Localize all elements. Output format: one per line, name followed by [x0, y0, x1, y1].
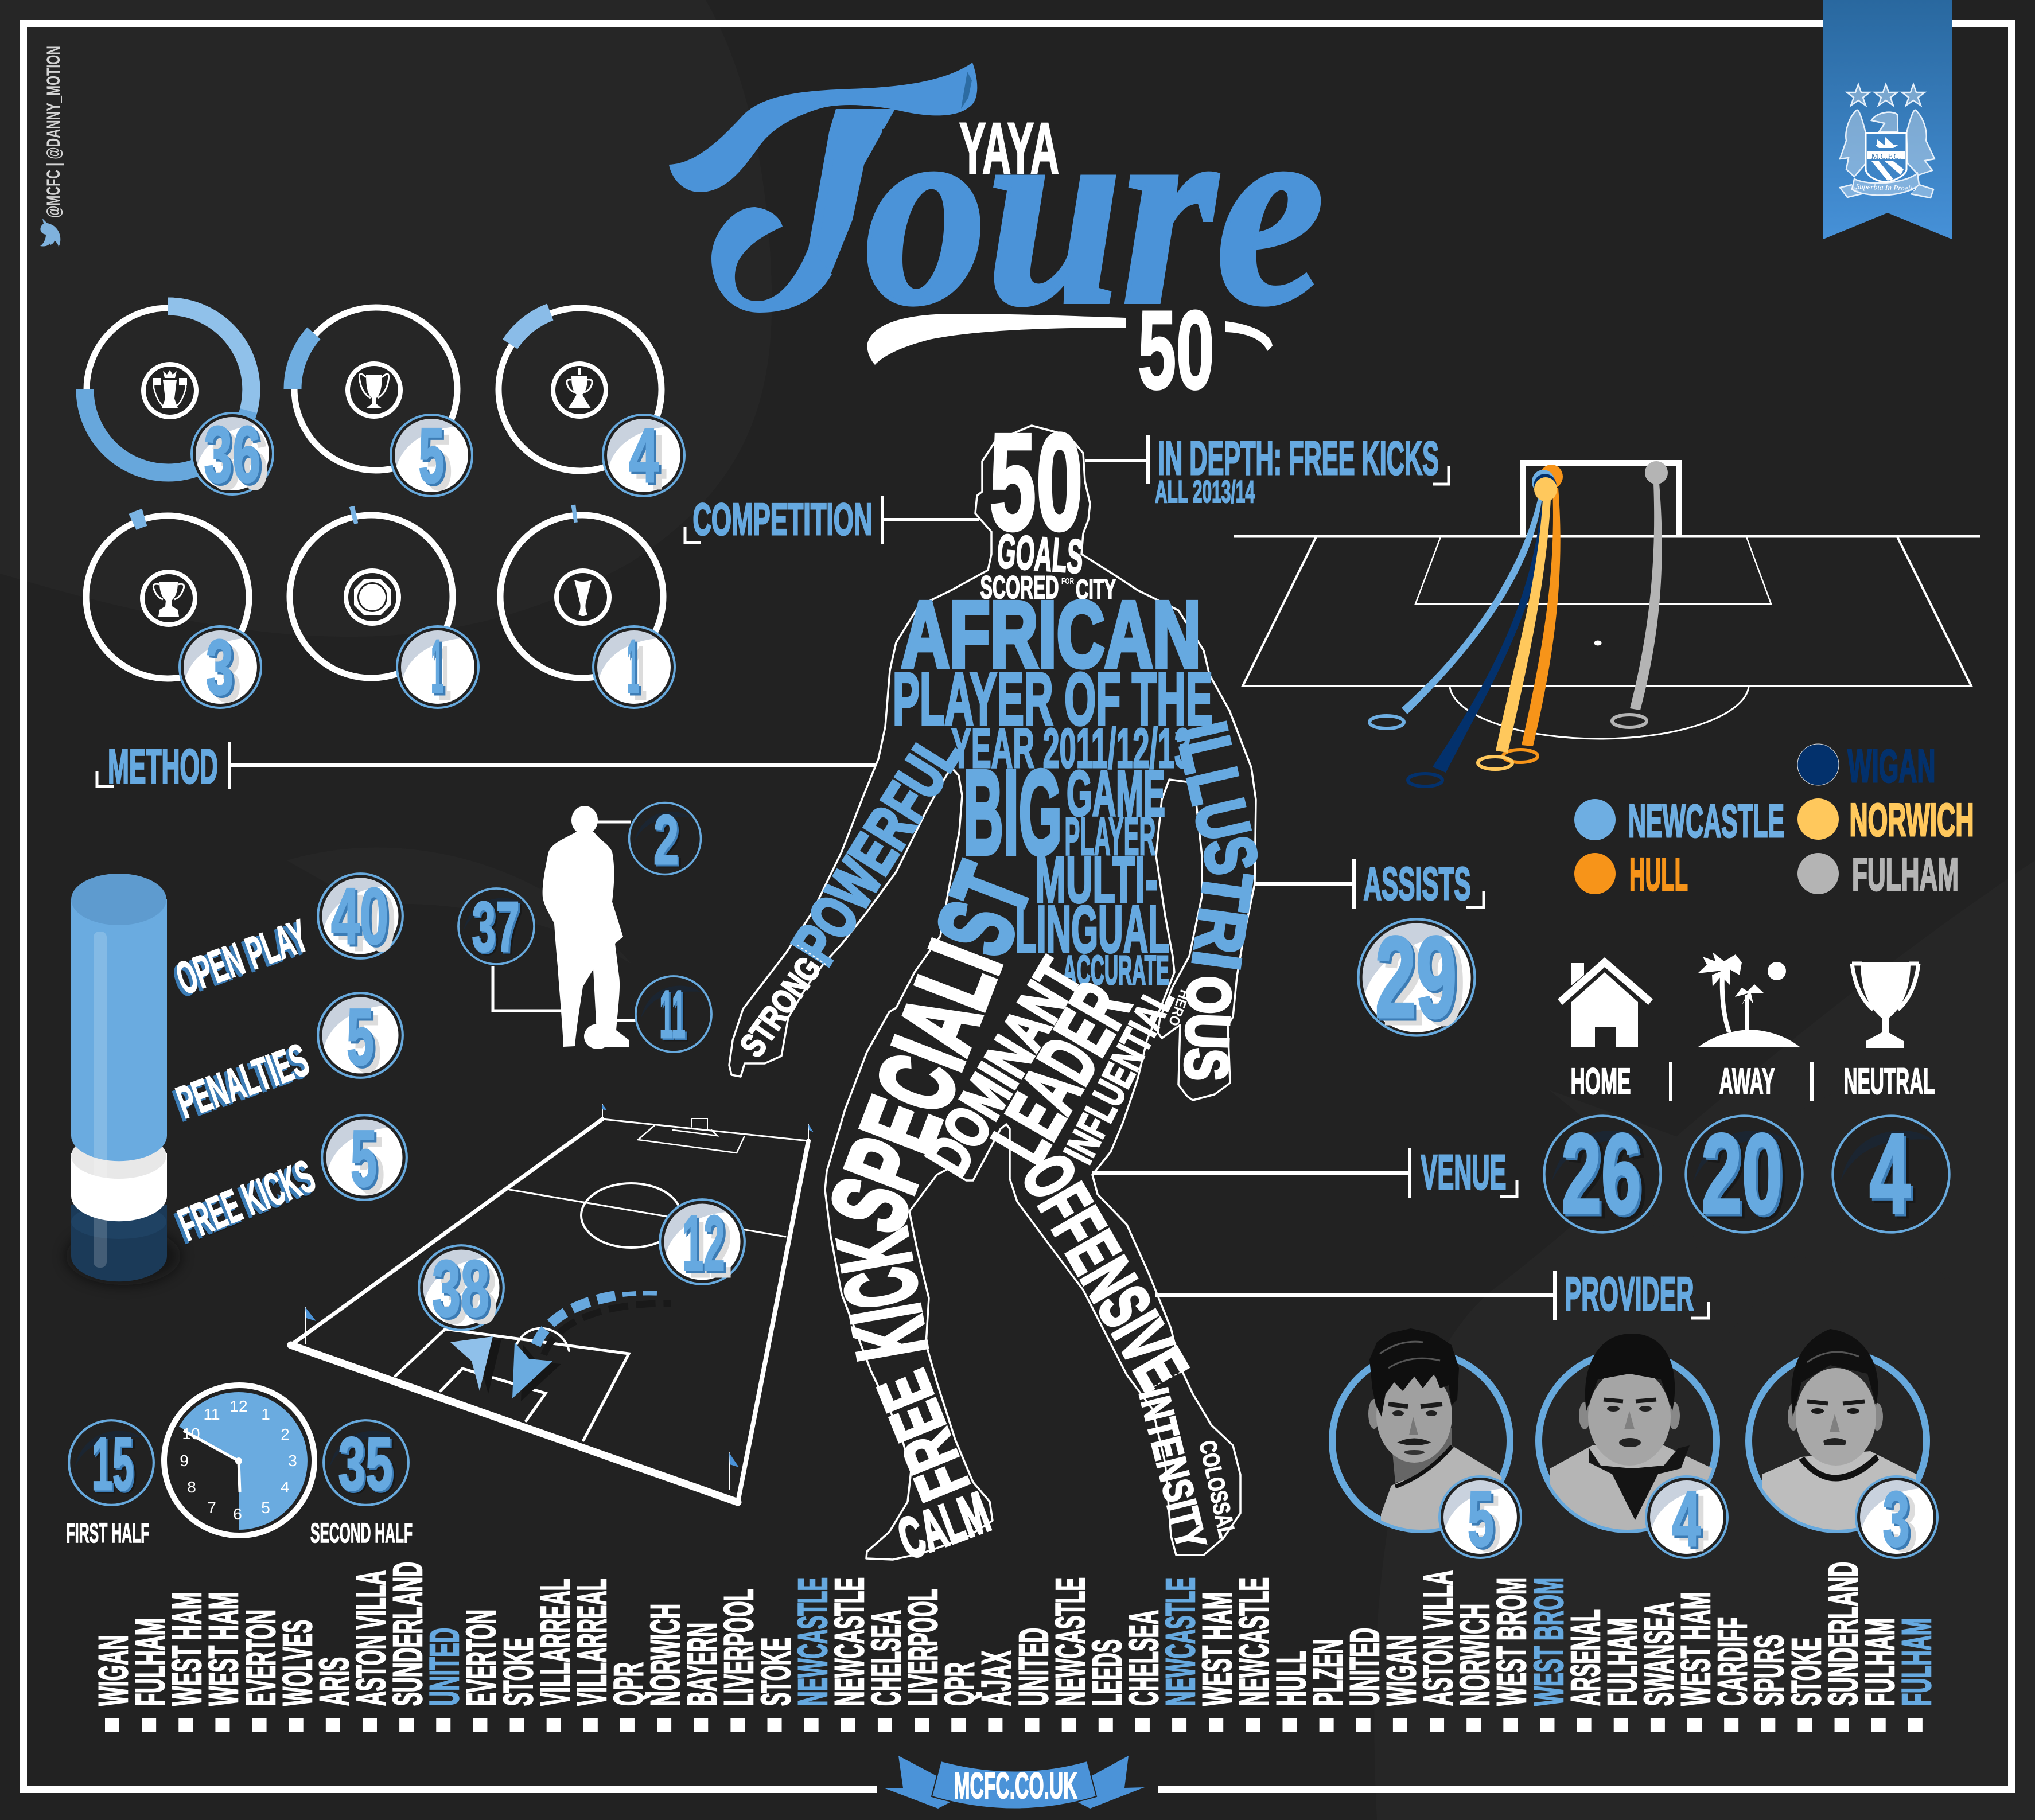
- provider section: PROVIDER: [1565, 1267, 1694, 1320]
- provider count 5: 5: [1474, 1480, 1501, 1567]
- list of opponents for all 50 goals: EVERTON: [459, 1609, 504, 1706]
- in depth free kicks heading: ALL 2013/14: [1155, 474, 1255, 509]
- title: Yaya Toure 50: oure: [865, 60, 1324, 361]
- head text: 50 goals scored for city: FOR: [1061, 576, 1074, 586]
- penalties: 5: [353, 999, 381, 1089]
- stacked cylinder chart: [66, 874, 181, 1285]
- penalty area lines: [1234, 463, 1980, 739]
- clock: first half and second half: 5: [261, 1499, 270, 1517]
- list of opponents for all 50 goals: UNITED: [1343, 1628, 1388, 1706]
- title: Yaya Toure 50: YAYA: [959, 108, 1059, 189]
- head text: 50 goals scored for city: [980, 405, 1116, 605]
- neutral count: [1832, 1110, 1950, 1241]
- in depth free kicks heading: [1148, 431, 1449, 509]
- list of opponents for all 50 goals: SUNDERLAND: [386, 1562, 431, 1706]
- ring: Super Cup 1: 1: [627, 624, 639, 708]
- lower body text: SPECIALIST: [808, 851, 1053, 1246]
- second half badge: SECOND HALF: [310, 1518, 413, 1549]
- clock: first half and second half: 8: [187, 1478, 196, 1496]
- lower body text: INFLUENTIAL: [1055, 981, 1182, 1171]
- torso text in blue: AFRICAN: [901, 582, 1201, 687]
- list of opponents for all 50 goals: ASTON VILLA: [349, 1570, 394, 1706]
- ring: Premier League 36: 36: [204, 410, 260, 499]
- title: Yaya Toure 50: T: [748, 39, 945, 369]
- second half badge: 35: [340, 1423, 395, 1507]
- venue section: [1092, 952, 1950, 1241]
- shot: Hull: [1503, 465, 1563, 762]
- torso text in blue: YEAR 2011/12/13: [951, 717, 1191, 780]
- icon: home: [1558, 957, 1653, 1047]
- second half badge: 35: [338, 1421, 392, 1506]
- clock: first half and second half: 10: [182, 1425, 200, 1443]
- list of opponents for all 50 goals: NEWCASTLE: [827, 1577, 873, 1706]
- away count: 20: [1702, 1110, 1782, 1237]
- list of opponents for all 50 goals: STOKE: [496, 1638, 542, 1706]
- left arm text: [733, 722, 974, 1063]
- free kick legend: WIGAN: [1847, 741, 1936, 792]
- away count: 20: [1706, 1115, 1787, 1241]
- title: Yaya Toure 50: 50: [1138, 288, 1214, 412]
- ring: League Cup 3: 3: [206, 623, 234, 711]
- lower body text: CALM: [890, 1480, 997, 1572]
- ring: Champions League 5: 5: [419, 412, 444, 499]
- ring: Super Cup 1: 1: [634, 631, 647, 715]
- ribbon with club crest: [1823, 0, 1952, 239]
- ring: League Cup 3: 3: [213, 630, 241, 718]
- left foot count: 11: [663, 980, 688, 1055]
- list of opponents for all 50 goals: NORWICH: [643, 1604, 688, 1706]
- venue labels: HOME: [1571, 1061, 1631, 1102]
- lower body text: INTENSITY: [1130, 1383, 1215, 1553]
- list of opponents for all 50 goals: NEWCASTLE: [791, 1577, 836, 1706]
- open play: OPEN PLAY: [170, 910, 314, 1004]
- 3D pitch: location of goals: [291, 1104, 814, 1502]
- right foot count: [458, 888, 534, 969]
- ribbon with club crest: Superbia In Proelio: [1855, 182, 1916, 193]
- clock: first half and second half: 6: [233, 1505, 242, 1523]
- second half badge: [310, 1420, 413, 1549]
- list of opponents for all 50 goals: VILLARREAL: [533, 1579, 578, 1706]
- lower body text: OFFENSIVE: [1006, 1141, 1202, 1402]
- head count: 2: [657, 804, 682, 882]
- right foot count: 37: [472, 888, 520, 966]
- assists section: 29: [1375, 913, 1457, 1042]
- right foot count: 37: [474, 890, 521, 968]
- away count: [1686, 1110, 1803, 1241]
- shot: Wigan: [1408, 474, 1557, 786]
- torso text in blue: PLAYER: [1065, 806, 1155, 866]
- list of opponents for all 50 goals: [91, 1562, 1940, 1725]
- free kicks: FREE KICKS: [172, 1150, 322, 1250]
- free kick legend: [1574, 741, 1974, 901]
- arrow: left: [450, 1336, 493, 1391]
- method labels and counts: [167, 872, 407, 1254]
- ring: Premier League 36: 36: [207, 412, 263, 501]
- assists section: 29: [1383, 919, 1465, 1049]
- lower body text: COLOSSAL: [1194, 1438, 1240, 1540]
- ribbon with club crest: M.C.F.C.: [1871, 153, 1901, 161]
- method section heading: METHOD: [108, 739, 218, 793]
- provider count 4: 4: [1672, 1475, 1701, 1562]
- ring: Champions League 5: [293, 307, 472, 506]
- list of opponents for all 50 goals: WEST BROM: [1527, 1577, 1572, 1706]
- assists section: [1255, 858, 1484, 1049]
- in depth free kicks heading: IN DEPTH: FREE KICKS: [1158, 431, 1439, 485]
- home count: 26: [1564, 1113, 1643, 1239]
- list of opponents for all 50 goals: WEST BROM: [1489, 1577, 1535, 1706]
- list of opponents for all 50 goals: FULHAM: [128, 1618, 173, 1706]
- venue labels: NEUTRAL: [1844, 1061, 1935, 1102]
- lower body text: KICK: [816, 1223, 948, 1367]
- penalties: 5: [347, 992, 374, 1082]
- list of opponents for all 50 goals: BAYERN: [680, 1623, 725, 1706]
- provider section: [1155, 1267, 1937, 1567]
- torso text in blue: MULTI-: [1035, 844, 1158, 916]
- open play: 40: [331, 872, 388, 961]
- shot: Fulham: [1612, 461, 1668, 727]
- torso text in blue: LINGUAL: [1015, 892, 1169, 966]
- free kick legend: NEWCASTLE: [1628, 796, 1784, 847]
- provider count 3: 3: [1883, 1475, 1909, 1562]
- clock: first half and second half: 4: [281, 1478, 290, 1496]
- ring: Community Shield 1: 1: [438, 631, 451, 715]
- shot: Norwich: [1478, 477, 1557, 769]
- list of opponents for all 50 goals: LIVERPOOL: [901, 1589, 946, 1706]
- right foot count: 37: [475, 891, 523, 969]
- lower body text: [808, 851, 1240, 1572]
- home count: 26: [1562, 1110, 1641, 1237]
- list of opponents for all 50 goals: SPURS: [1747, 1635, 1792, 1706]
- connector lines from figure: [1085, 459, 1148, 462]
- provider count 4: 4: [1679, 1480, 1708, 1567]
- list of opponents for all 50 goals: PLZEN: [1306, 1639, 1351, 1706]
- clock: first half and second half: 7: [207, 1499, 216, 1517]
- shot: Newcastle: [1369, 470, 1555, 728]
- list of opponents for all 50 goals: AJAX: [974, 1651, 1020, 1706]
- assists section: ASSISTS: [1363, 858, 1471, 910]
- icon: away island: [1698, 952, 1800, 1047]
- lower body text: FREE: [863, 1361, 985, 1510]
- left arm text: POWERFUL: [779, 722, 974, 976]
- list of opponents for all 50 goals: ARIS: [312, 1657, 357, 1706]
- second half badge: 35: [342, 1424, 396, 1509]
- ring: Champions League 5: 5: [426, 419, 452, 506]
- provider count 5: 5: [1470, 1478, 1496, 1565]
- central player word-cloud figure: [729, 405, 1273, 1572]
- ring: League Cup 3: [86, 516, 261, 718]
- list of opponents for all 50 goals: FULHAM: [1600, 1618, 1645, 1706]
- list of opponents for all 50 goals: EVERTON: [239, 1609, 284, 1706]
- list of opponents for all 50 goals: QPR: [606, 1662, 652, 1706]
- torso text in blue: BIG: [963, 746, 1062, 879]
- venue section: VENUE: [1421, 1145, 1507, 1200]
- ring: Community Shield 1: 1: [433, 626, 446, 711]
- torso text in blue: [893, 582, 1213, 993]
- first half badge: 15: [92, 1421, 133, 1506]
- open play: OPEN PLAY: [167, 913, 312, 1007]
- venue labels: [1571, 1061, 1935, 1102]
- torso text in blue: GAME: [1067, 758, 1165, 829]
- head text: 50 goals scored for city: 50: [989, 405, 1083, 559]
- penalties: PENALTIES: [170, 1034, 315, 1128]
- lower body text: DOMINANT: [913, 948, 1094, 1187]
- provider portrait 3: [1749, 1329, 1927, 1537]
- list of opponents for all 50 goals: CHELSEA: [1122, 1610, 1167, 1706]
- provider portrait 1: [1332, 1328, 1515, 1537]
- head count: 2: [655, 802, 680, 880]
- ring: Champions League 5: 5: [421, 414, 446, 501]
- list of opponents for all 50 goals: WEST HAM: [1195, 1592, 1240, 1706]
- first half badge: 15: [93, 1423, 135, 1507]
- clock: first half and second half: 1: [261, 1405, 270, 1423]
- first half badge: [67, 1420, 154, 1549]
- free kick goal diagram: [1234, 461, 1980, 786]
- head count: 2: [653, 801, 679, 879]
- badge 12: 12: [688, 1206, 732, 1293]
- left foot count: 11: [660, 977, 685, 1053]
- ring: Premier League 36: [85, 306, 273, 506]
- clock: first half and second half: [67, 1385, 413, 1549]
- badge 38: 38: [432, 1244, 489, 1333]
- venue labels: AWAY: [1719, 1061, 1775, 1102]
- free kicks: 5: [353, 1116, 379, 1206]
- ring: Community Shield 1: 1: [431, 624, 443, 708]
- right arm text: OUS: [1172, 975, 1243, 1082]
- list of opponents for all 50 goals: NEWCASTLE: [1232, 1577, 1277, 1706]
- list of opponents for all 50 goals: WEST HAM: [165, 1592, 210, 1706]
- ring: League Cup 3: 3: [208, 626, 236, 713]
- right arm text: HERO: [1165, 988, 1193, 1028]
- list of opponents for all 50 goals: CHELSEA: [864, 1610, 909, 1706]
- list of opponents for all 50 goals: VILLARREAL: [570, 1579, 615, 1706]
- ring: Community Shield 1: [290, 515, 478, 715]
- provider count 4: [1646, 1475, 1727, 1567]
- penalties: 5: [349, 994, 376, 1084]
- list of opponents for all 50 goals: HULL: [1269, 1651, 1314, 1706]
- twitter credit: [40, 46, 64, 247]
- list of opponents for all 50 goals: CARDIFF: [1710, 1617, 1756, 1706]
- badge 38: 38: [434, 1246, 492, 1335]
- free kicks: 5: [358, 1120, 384, 1210]
- list of opponents for all 50 goals: NEWCASTLE: [1048, 1577, 1094, 1706]
- list of opponents for all 50 goals: STOKE: [1784, 1638, 1830, 1706]
- list of opponents for all 50 goals: NEWCASTLE: [1158, 1577, 1204, 1706]
- badge 38: [419, 1244, 504, 1340]
- badge 12: [660, 1199, 745, 1293]
- list of opponents for all 50 goals: LIVERPOOL: [717, 1589, 762, 1706]
- body part diagram: head, right foot, left foot: [458, 801, 711, 1055]
- badge 38: 38: [439, 1251, 497, 1340]
- footer ribbon: MCFC.CO.UK: [954, 1765, 1077, 1806]
- list of opponents for all 50 goals: ASTON VILLA: [1416, 1570, 1461, 1706]
- provider count 3: 3: [1890, 1480, 1917, 1567]
- left foot count: [636, 976, 711, 1055]
- free kicks: 5: [351, 1113, 377, 1203]
- list of opponents for all 50 goals: ARSENAL: [1563, 1609, 1609, 1706]
- provider count 3: 3: [1885, 1478, 1912, 1565]
- torso text in blue: ACCURATE: [1063, 948, 1169, 993]
- clock: first half and second half: 12: [229, 1397, 248, 1415]
- ring: FA Cup 4: 4: [636, 420, 666, 505]
- provider count 3: [1856, 1475, 1937, 1567]
- open play: 40: [333, 874, 391, 963]
- competition rings: [85, 306, 684, 718]
- list of opponents for all 50 goals: FULHAM: [1894, 1618, 1940, 1706]
- neutral count: 4: [1871, 1113, 1913, 1239]
- neutral count: 4: [1869, 1110, 1911, 1237]
- free kicks: FREE KICKS: [169, 1154, 319, 1254]
- assists section: 29: [1378, 915, 1459, 1044]
- ring: Super Cup 1: [500, 513, 675, 715]
- provider portrait 2: [1539, 1334, 1717, 1537]
- list of opponents for all 50 goals: SUNDERLAND: [1821, 1562, 1866, 1706]
- list of opponents for all 50 goals: WEST HAM: [1674, 1592, 1719, 1706]
- ring: FA Cup 4: 4: [631, 415, 661, 501]
- arrow: right: [512, 1342, 552, 1398]
- list of opponents for all 50 goals: UNITED: [422, 1628, 468, 1706]
- clock: first half and second half: 9: [180, 1452, 189, 1470]
- badge 12: 12: [682, 1199, 725, 1287]
- free kick legend: HULL: [1629, 849, 1688, 901]
- list of opponents for all 50 goals: LEEDS: [1085, 1639, 1130, 1706]
- icon: neutral trophy: [1852, 962, 1919, 1048]
- list of opponents for all 50 goals: UNITED: [1011, 1628, 1057, 1706]
- head text: 50 goals scored for city: CITY: [1076, 575, 1116, 605]
- list of opponents for all 50 goals: QPR: [937, 1662, 983, 1706]
- torso text in blue: PLAYER OF THE: [893, 658, 1213, 741]
- ring: Super Cup 1: 1: [629, 626, 641, 711]
- footer ribbon: [884, 1756, 1145, 1809]
- list of opponents for all 50 goals: WIGAN: [1379, 1635, 1425, 1706]
- list of opponents for all 50 goals: SWANSEA: [1637, 1602, 1682, 1706]
- right arm text: ILLUS: [1161, 715, 1273, 882]
- clock: first half and second half: 3: [288, 1452, 297, 1470]
- clock: first half and second half: 11: [203, 1405, 220, 1423]
- competition section heading: COMPETITION: [693, 494, 872, 544]
- list of opponents for all 50 goals: STOKE: [754, 1638, 799, 1706]
- ring: Premier League 36: 36: [211, 417, 269, 506]
- first half badge: FIRST HALF: [67, 1518, 149, 1549]
- right arm text: TRI: [1178, 867, 1266, 974]
- provider count 5: [1439, 1475, 1521, 1567]
- method section heading: [97, 739, 878, 793]
- head count: [629, 801, 701, 882]
- away count: 20: [1704, 1113, 1784, 1239]
- figure outline: [729, 426, 1256, 1560]
- lower body text: LEADER: [976, 969, 1147, 1176]
- clock: first half and second half: 2: [281, 1425, 290, 1443]
- left arm text: STRONG: [733, 950, 828, 1063]
- title: Yaya Toure 50: [669, 63, 1321, 391]
- free kicks: FREE KICKS: [169, 1153, 319, 1253]
- penalties: PENALTIES: [168, 1036, 312, 1131]
- list of opponents for all 50 goals: WOLVES: [275, 1620, 321, 1706]
- home count: 26: [1567, 1115, 1647, 1241]
- list of opponents for all 50 goals: NORWICH: [1453, 1604, 1498, 1706]
- player silhouette: [543, 806, 629, 1049]
- open play: 40: [338, 879, 396, 968]
- right arm text: [1161, 715, 1273, 1082]
- list of opponents for all 50 goals: WEST HAM: [201, 1592, 247, 1706]
- ring: FA Cup 4: [499, 308, 684, 505]
- list of opponents for all 50 goals: WIGAN: [91, 1635, 137, 1706]
- home count: [1544, 1110, 1661, 1241]
- arrow shadows: [459, 1339, 561, 1401]
- first half badge: 15: [95, 1424, 137, 1509]
- list of opponents for all 50 goals: FULHAM: [1858, 1618, 1903, 1706]
- provider count 4: 4: [1674, 1478, 1703, 1565]
- head text: 50 goals scored for city: SCORED: [980, 569, 1059, 605]
- provider count 5: 5: [1468, 1475, 1494, 1562]
- head text: 50 goals scored for city: GOALS: [995, 524, 1085, 583]
- ring: FA Cup 4: 4: [629, 413, 659, 498]
- neutral count: 4: [1874, 1115, 1915, 1241]
- dashed arrow path: [536, 1293, 671, 1355]
- left foot count: 11: [661, 979, 687, 1054]
- badge 12: 12: [684, 1202, 727, 1289]
